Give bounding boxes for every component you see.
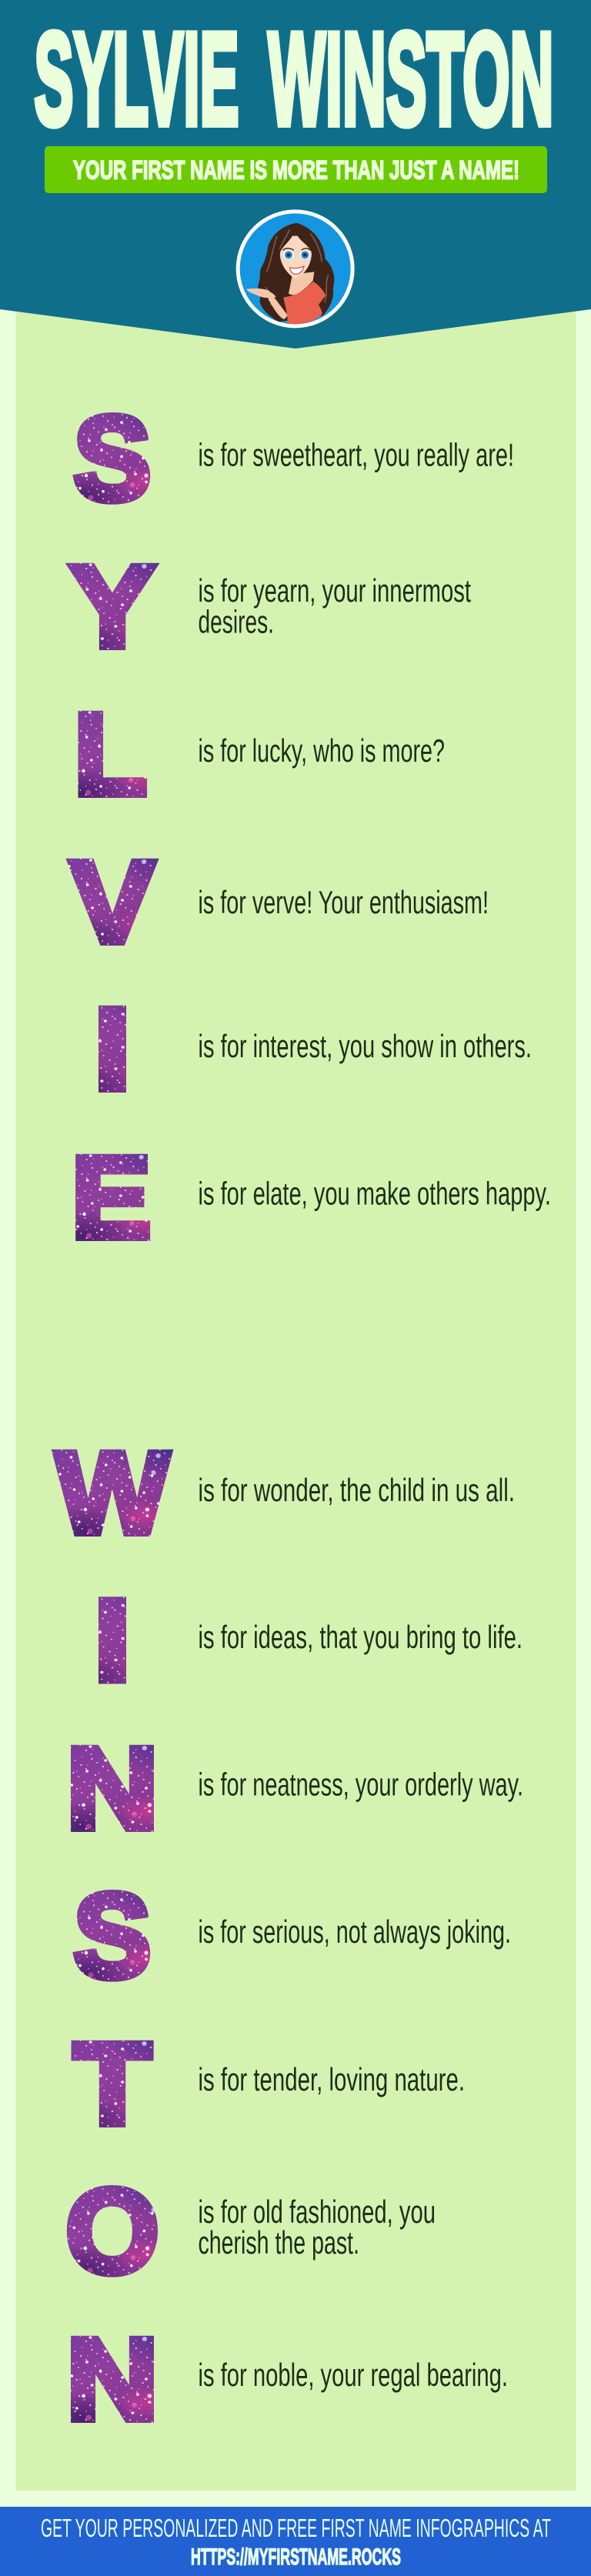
letter N: N (66, 1724, 159, 1853)
acrostic row: O (66, 2164, 436, 2297)
footer url: HTTPS://MYFIRSTNAME.ROCKS (191, 2544, 401, 2570)
acrostic row: V (71, 838, 489, 967)
letter W: W (56, 1429, 169, 1558)
text: yearn: desires. (199, 603, 274, 640)
acrostic row: N (66, 2315, 508, 2444)
text: old fashioned (199, 2194, 436, 2261)
letter E: E (72, 1133, 151, 1263)
text: old fashioned: cherish the past. (199, 2224, 359, 2261)
acrostic row: L (74, 690, 445, 819)
letter T: T (74, 2020, 151, 2149)
letter L: L (74, 690, 147, 819)
acrostic row: N (66, 1724, 523, 1853)
acrostic row: Y (70, 542, 471, 672)
footer (0, 2507, 591, 2576)
header banner (0, 0, 591, 349)
acrostic row: E (72, 1133, 551, 1263)
letter S: S (74, 1870, 151, 2002)
acrostic row: I (94, 985, 532, 1114)
acrostic row: W (56, 1429, 515, 1558)
letter S: S (74, 392, 151, 525)
icon: woman avatar in circle (236, 209, 355, 328)
acrostic row: S (74, 392, 514, 525)
subtitle banner (45, 146, 547, 193)
letter I: I (94, 985, 131, 1114)
acrostic row: S (74, 1870, 511, 2002)
letter V: V (71, 838, 154, 967)
text: lucky: is for lucky, who is more? (199, 732, 445, 769)
acrostic row: T (74, 2020, 465, 2149)
acrostic row: I (94, 1576, 523, 1705)
text: yearn: is for yearn, your innermost (199, 572, 471, 609)
title: SYLVIE (34, 6, 239, 152)
text: yearn (199, 572, 471, 640)
letter Y: Y (70, 542, 155, 672)
letter O: O (66, 2164, 159, 2297)
text: old fashioned: is for old fashioned, you (199, 2194, 436, 2230)
letter I: I (94, 1576, 131, 1705)
text: tender: is for tender, loving nature. (199, 2061, 465, 2097)
letter N: N (66, 2315, 159, 2444)
